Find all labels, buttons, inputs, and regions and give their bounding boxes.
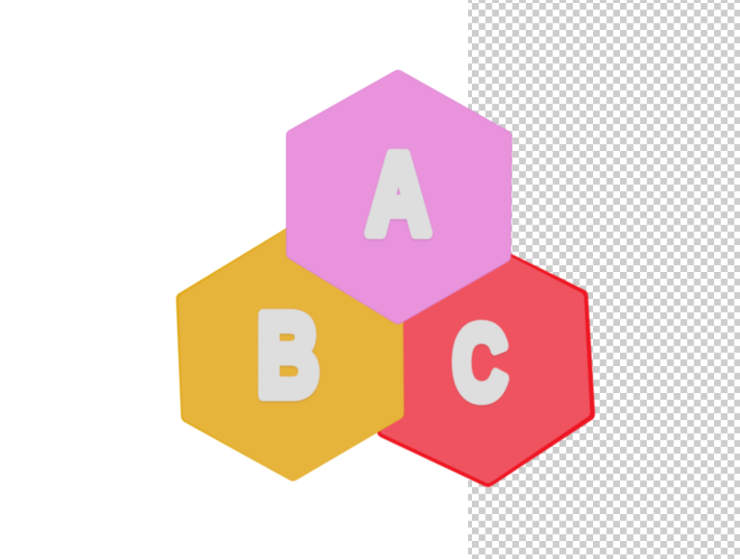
hexagon C side edge [384,261,588,480]
hexagon B (yellow) [183,234,397,474]
hexagon C (red) [384,261,588,480]
hexagon B face [185,235,397,474]
hexagon B side edge [183,234,397,474]
hexagon C face [386,263,584,477]
letter B: B [257,290,319,420]
hexagon A side edge [293,77,505,317]
hexagon A face [293,77,505,317]
transparency checkerboard panel [468,0,740,559]
hexagon A (pink) [293,77,505,317]
letter C: C [453,306,507,421]
letter A: A [367,132,430,258]
